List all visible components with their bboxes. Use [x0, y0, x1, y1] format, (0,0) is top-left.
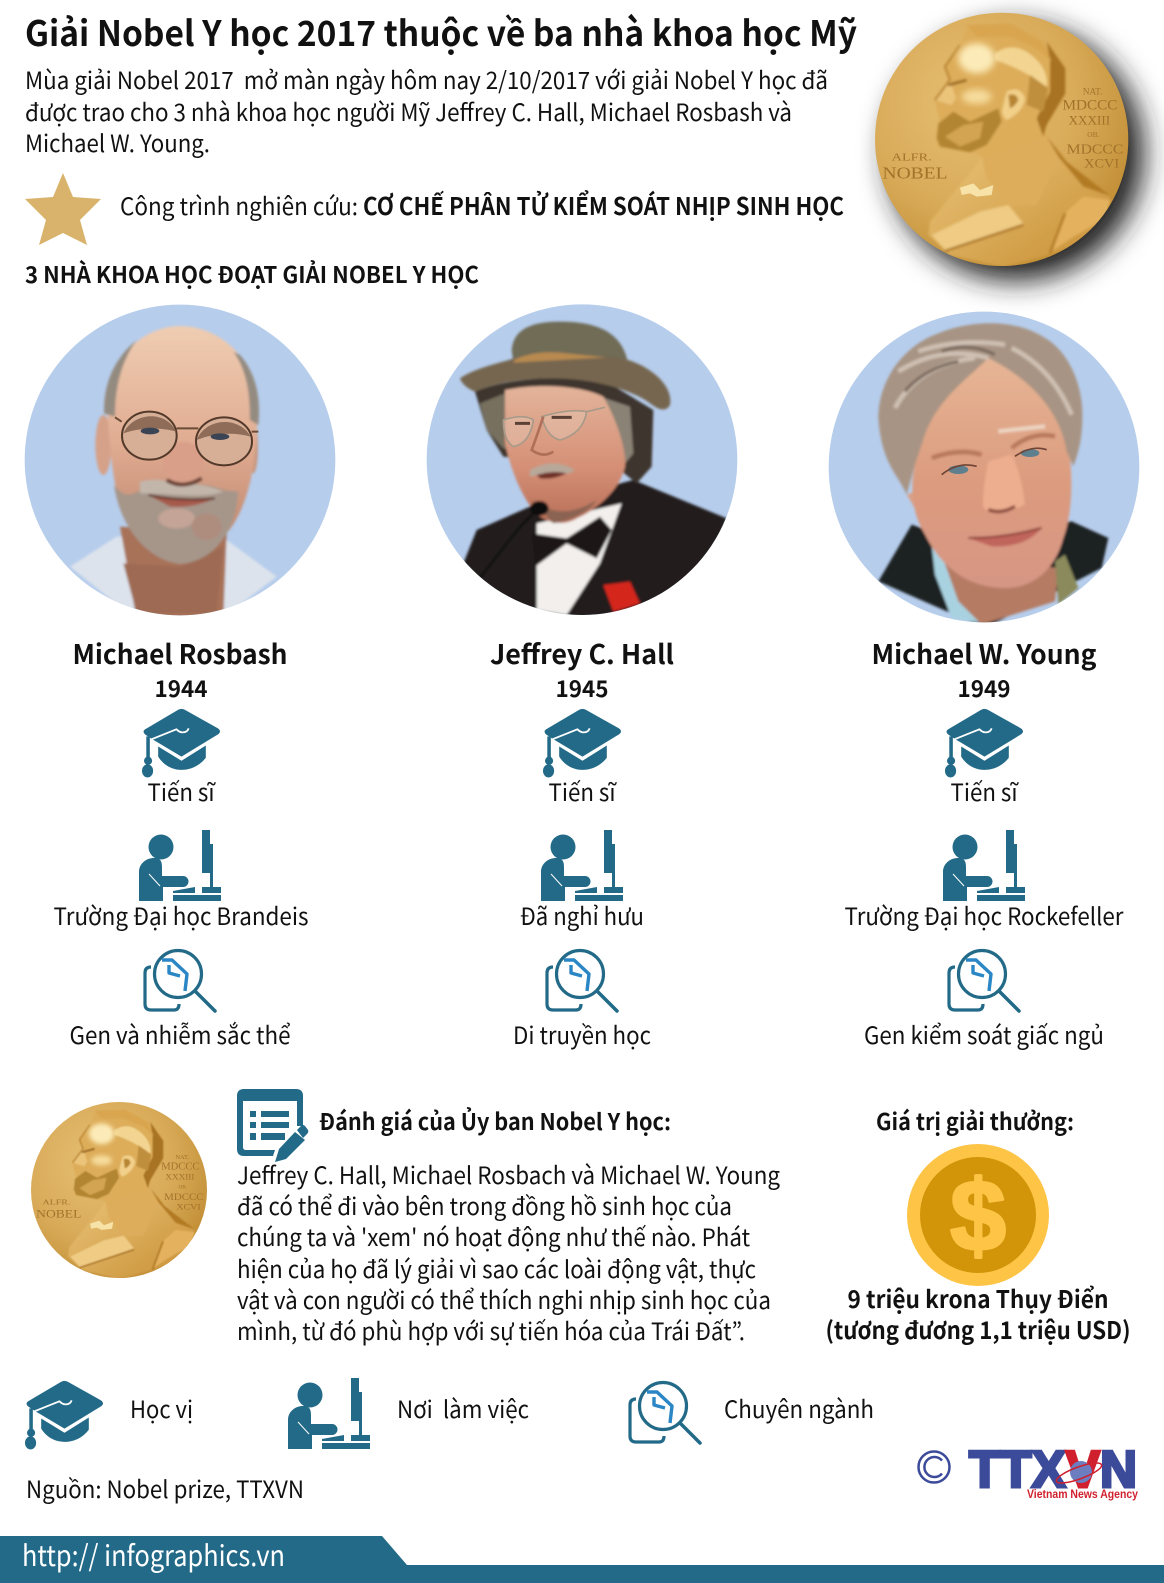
legend icon: degree — [25, 1381, 103, 1449]
degree: Tiến sĩ — [548, 773, 617, 808]
committee citation: Jeffrey C. Hall, Michael Rosbach và Michael W. Young — [237, 1156, 780, 1191]
birth year: 1945 — [556, 670, 608, 704]
logo: TTXVN: TTXVN — [969, 1441, 1137, 1499]
icon: person at computer — [139, 830, 221, 901]
portrait: Michael Rosbash — [25, 305, 335, 620]
icon: magnifier — [547, 950, 617, 1011]
prize value heading: Giá trị giải thưởng: — [876, 1103, 1074, 1137]
committee citation — [237, 1156, 780, 1347]
field: Di truyền học — [513, 1016, 651, 1051]
research topic: Công trình nghiên cứu: — [120, 187, 358, 222]
name: Michael Rosbash — [72, 633, 288, 672]
small medal — [31, 1102, 207, 1279]
name: Jeffrey C. Hall — [490, 633, 674, 672]
birth year: 1949 — [958, 670, 1010, 704]
intro paragraph — [25, 61, 828, 159]
research topic: CƠ CHẾ PHÂN TỬ KIỂM SOÁT NHỊP SINH HỌC — [363, 187, 844, 222]
name: Michael W. Young — [872, 633, 1096, 672]
icon: person at computer — [943, 830, 1025, 901]
icon: star — [25, 173, 101, 245]
field: Gen và nhiễm sắc thể — [70, 1016, 290, 1051]
degree: Tiến sĩ — [148, 773, 216, 808]
icon: graduation cap — [142, 709, 220, 777]
panel: Michael Rosbash — [25, 305, 335, 1051]
icon: gold coin — [907, 1144, 1049, 1286]
legend label: degree: Học vị — [130, 1390, 193, 1425]
workplace: Đã nghỉ hưu — [520, 897, 644, 932]
intro paragraph: được trao cho 3 nhà khoa học người Mỹ Jeffrey C. Hall, Michael Rosbash và — [25, 93, 792, 128]
committee citation: chúng ta và 'xem' nó hoạt động như thế nào. Phát — [237, 1218, 750, 1253]
icon: graduation cap — [945, 709, 1023, 777]
footer banner — [0, 1533, 1164, 1583]
research topic — [120, 187, 844, 222]
portrait: Michael W. Young — [829, 312, 1139, 628]
legend icon: field — [630, 1382, 700, 1443]
portrait: Jeffrey C. Hall — [427, 304, 737, 643]
committee citation: hiện của họ đã lý giải vì sao các loài động vật, thực — [237, 1250, 756, 1285]
field: Gen kiểm soát giấc ngủ — [864, 1016, 1104, 1051]
panel: Michael W. Young — [829, 312, 1139, 1051]
icon: document with pencil — [237, 1089, 308, 1162]
workplace: Trường Đại học Brandeis — [54, 897, 308, 932]
panel: Jeffrey C. Hall — [427, 304, 737, 1051]
website url: http:// infographics.vn — [22, 1533, 285, 1575]
legend label: workplace: Nơi làm việc — [397, 1390, 529, 1425]
title: Giải Nobel Y học 2017 thuộc về ba nhà khoa học Mỹ — [25, 6, 857, 57]
logo: TTXVN: Vietnam News Agency — [1027, 1489, 1139, 1501]
source: Nguồn: Nobel prize, TTXVN — [26, 1470, 304, 1505]
copyright symbol — [918, 1452, 950, 1482]
degree: Tiến sĩ — [950, 773, 1019, 808]
icon: person at computer — [541, 830, 623, 901]
birth year: 1944 — [154, 670, 208, 704]
legend — [25, 1378, 874, 1449]
intro paragraph: Michael W. Young. — [25, 124, 210, 159]
medal with shadow — [875, 13, 1144, 281]
committee citation: đã có thể đi vào bên trong đồng hồ sinh học của — [237, 1187, 732, 1222]
committee heading: Đánh giá của Ủy ban Nobel Y học: — [319, 1103, 671, 1137]
legend label: field: Chuyên ngành — [724, 1390, 874, 1425]
committee citation: mình, từ đó phù hợp với sự tiến hóa của Trái Đất”. — [237, 1312, 745, 1347]
legend icon: workplace — [288, 1378, 370, 1449]
prize value — [826, 1280, 1130, 1346]
intro paragraph: Mùa giải Nobel 2017 mở màn ngày hôm nay 2/10/2017 với giải Nobel Y học đã — [25, 61, 828, 96]
prize value: (tương đương 1,1 triệu USD) — [826, 1311, 1130, 1346]
icon: graduation cap — [543, 709, 621, 777]
committee citation: vật và con người có thể thích nghi nhịp sinh học của — [237, 1281, 771, 1316]
workplace: Trường Đại học Rockefeller — [844, 897, 1124, 932]
icon: magnifier — [145, 950, 215, 1011]
icon: gold coin: $ — [950, 1160, 1006, 1272]
prize value: 9 triệu krona Thụy Điển — [848, 1280, 1108, 1315]
icon: magnifier — [949, 950, 1019, 1011]
section heading: 3 NHÀ KHOA HỌC ĐOẠT GIẢI NOBEL Y HỌC — [25, 256, 479, 290]
